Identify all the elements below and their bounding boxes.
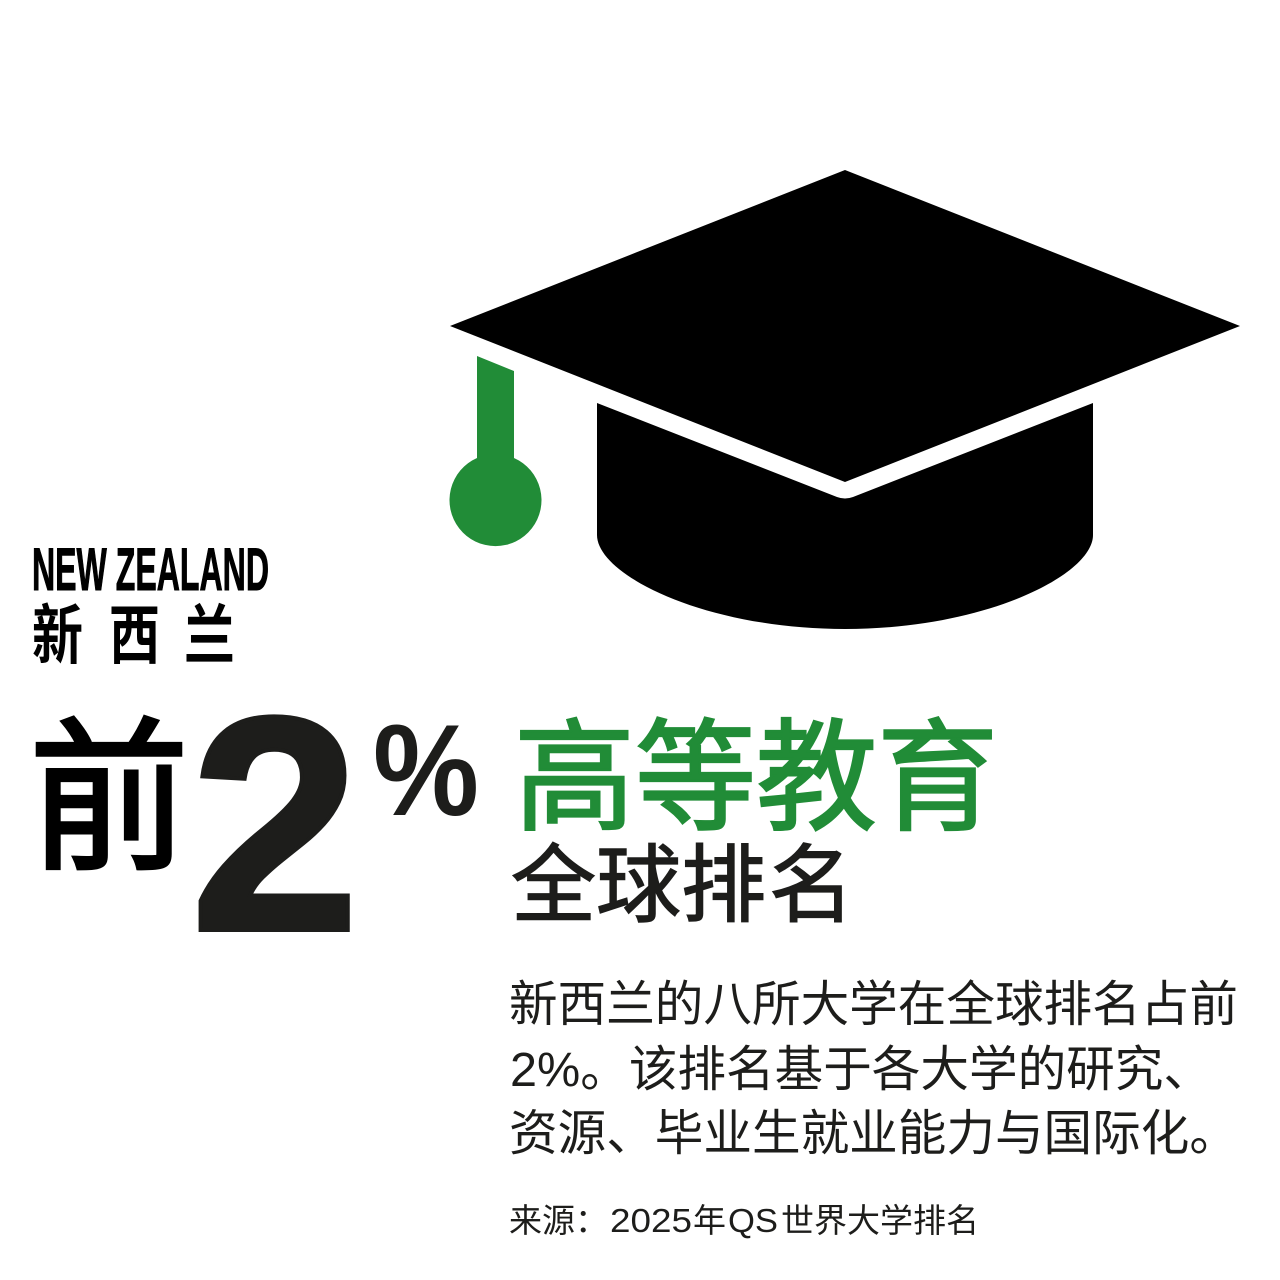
body text: 资源、毕业生就业能力与国际化。 [509,1107,1238,1161]
stat prefix: 前 [29,708,189,892]
country name [32,536,269,672]
percent sign: % [373,697,479,843]
source note [509,1202,979,1239]
heading green: 高等教育 [514,710,998,846]
key statistic [29,653,479,995]
body text: 新西兰的八所大学在全球排名占前 [509,978,1238,1032]
stat number: 2 [190,653,360,995]
source note: 年 [693,1202,726,1239]
source note: 世界大学排名 [781,1202,979,1239]
chinese name: 新西兰 [32,600,235,672]
cap board [450,170,1240,482]
english name: NEW ZEALAND [32,536,269,603]
heading subtitle: 全球排名 [511,839,854,934]
body text: 2%。该排名基于各大学的研究、 [510,1043,1212,1097]
heading [511,710,998,934]
body text [509,978,1238,1161]
tassel [450,356,542,546]
icon: graduation cap [450,170,1240,629]
source note: 来源： [509,1202,608,1239]
source note: QS [728,1202,778,1239]
cap base [597,403,1093,629]
source note: 2025 [610,1202,692,1239]
